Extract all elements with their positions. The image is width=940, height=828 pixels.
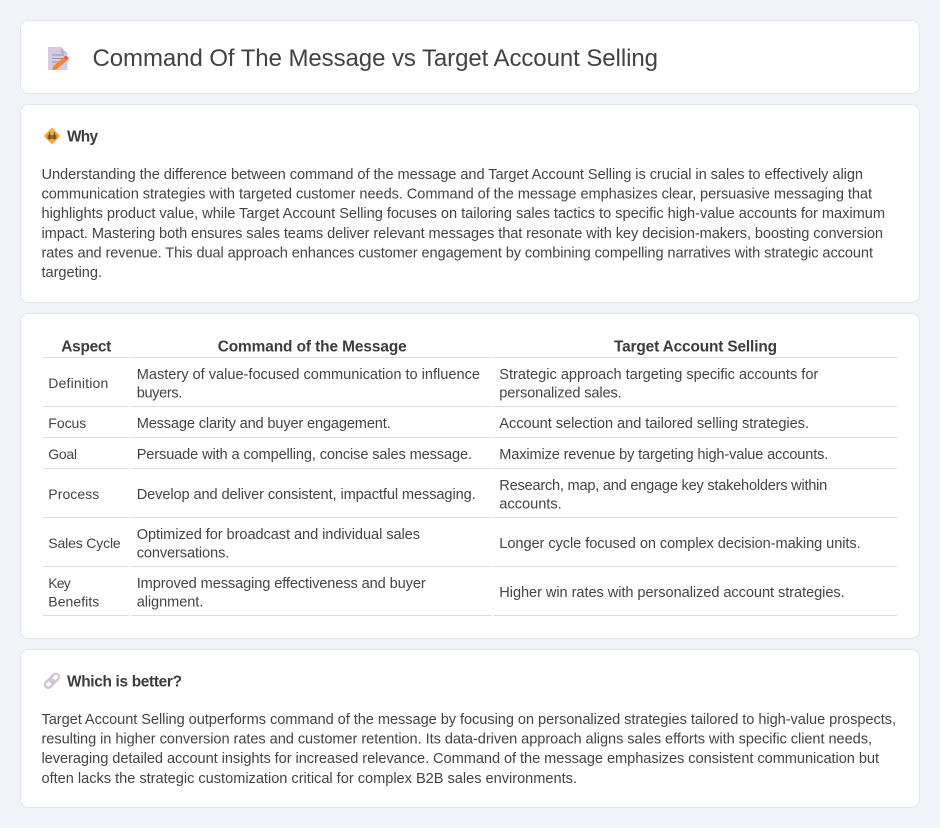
panel: which is better [20, 650, 920, 808]
table row: definition: Strategic approach targeting specific accounts for [499, 367, 818, 383]
table row: key benefits: Key [48, 575, 71, 591]
heading: which is better: Which is better? [67, 674, 182, 691]
table row: sales cycle: Optimized for broadcast and individual sales [137, 527, 420, 543]
title: Command Of The Message vs Target Account Selling [92, 45, 658, 72]
panel: title header [20, 20, 920, 94]
text block: which is better paragraph: leveraging detailed account insights for increased relevance. Command of the message emphasizes consistent communication but [42, 751, 879, 767]
table header row: Aspect [61, 338, 111, 356]
table row: process: Process [48, 486, 99, 502]
text block: which is better paragraph: often lacks the strategic customization critical for complex B2B sales environments. [42, 771, 577, 787]
table row: definition: personalized sales. [499, 386, 622, 402]
table row: sales cycle [43, 527, 897, 567]
table row: definition: buyers. [137, 386, 182, 402]
table row: definition: Mastery of value-focused communication to influence [137, 367, 480, 383]
table header row [43, 338, 897, 358]
text block: why paragraph: Understanding the difference between command of the message and Target Account Selling is crucial in sales to effectively align [42, 167, 863, 183]
table row: goal [43, 446, 897, 469]
icon: chain link [44, 672, 60, 689]
table row: process: accounts. [499, 496, 562, 512]
heading: why: Why [67, 129, 98, 146]
table row: definition [43, 367, 897, 407]
table row: key benefits [43, 575, 897, 616]
table row: key benefits: Improved messaging effectiveness and buyer [137, 576, 426, 592]
text block: why paragraph: rates and revenue. This dual approach enhances customer engagement by combining compelling narratives with strategic account [42, 245, 873, 261]
table row: focus [43, 415, 897, 438]
text block: why paragraph: highlights product value, while Target Account Selling focuses on tailoring sales tactics to specific high-value accounts for maximum [42, 206, 885, 222]
table row: sales cycle: conversations. [137, 546, 229, 562]
table row: focus: Account selection and tailored selling strategies. [499, 416, 809, 432]
table row: sales cycle: Sales Cycle [48, 535, 121, 551]
table row: key benefits: Benefits [48, 594, 99, 610]
icon: warning diamond [44, 128, 60, 144]
table row: process [43, 478, 897, 518]
text block: which is better paragraph: resulting in higher conversion rates and customer retention. Its data-driven approach aligns sales efforts with specific client needs, [42, 732, 872, 748]
panel: why [20, 104, 920, 302]
table row: sales cycle: Longer cycle focused on complex decision-making units. [499, 536, 861, 552]
table row: definition: Definition [48, 375, 108, 391]
table row: process: Research, map, and engage key stakeholders within [499, 478, 827, 494]
table row: process: Develop and deliver consistent, impactful messaging. [137, 487, 476, 503]
panel: comparison table [20, 314, 920, 638]
table row: key benefits: Higher win rates with personalized account strategies. [499, 585, 845, 601]
table row: focus: Message clarity and buyer engagement. [137, 416, 391, 432]
text block: why paragraph: impact. Mastering both ensures sales teams deliver relevant messages that resonate with key decision-makers, boosting conversion [42, 226, 883, 242]
table row: goal: Persuade with a compelling, concise sales message. [137, 447, 472, 463]
table header row: Target Account Selling [614, 338, 777, 356]
text block: why paragraph: targeting. [42, 265, 102, 281]
text block: why paragraph: communication strategies with targeted customer needs. Command of the message emphasizes clear, persuasive messaging that [42, 187, 872, 203]
icon: document with pencil [48, 47, 69, 70]
table row: goal: Maximize revenue by targeting high-value accounts. [499, 447, 828, 463]
table row: key benefits: alignment. [137, 594, 203, 610]
text block: why paragraph [42, 167, 885, 281]
text block: which is better paragraph [42, 712, 896, 787]
table header row: Command of the Message [218, 338, 407, 356]
table row: goal: Goal [48, 446, 77, 462]
table row: focus: Focus [48, 415, 86, 431]
text block: which is better paragraph: Target Account Selling outperforms command of the message by focusing on personalized strategies tailored to high-value prospects, [42, 712, 896, 728]
